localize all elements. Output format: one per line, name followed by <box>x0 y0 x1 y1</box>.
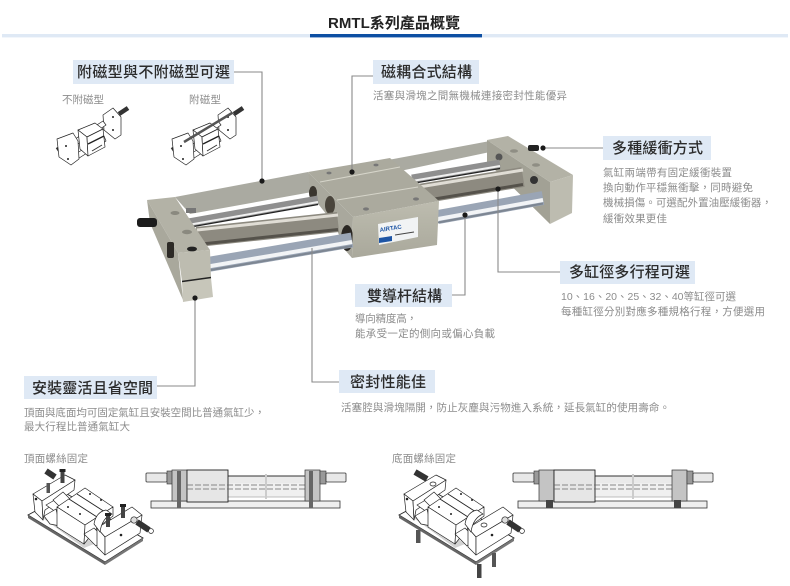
heading box <box>560 261 695 284</box>
description <box>24 406 265 433</box>
icon: magnetic cylinder <box>172 108 243 165</box>
anchor dot <box>349 169 355 175</box>
leader line <box>352 76 373 172</box>
description: 機械損傷。可選配外置油壓緩衝器， <box>603 196 772 209</box>
title: RMTL系列產品概覽 <box>328 14 460 32</box>
heading: 多缸徑多行程可選 <box>569 263 690 281</box>
heading: 密封性能佳 <box>350 373 426 391</box>
description: 頂面與底面均可固定氣缸且安裝空間比普通氣缸少， <box>24 406 265 419</box>
leader line <box>312 248 339 382</box>
back rail <box>175 172 312 214</box>
illustration: magnetic and non-magnetic variants <box>57 93 243 165</box>
heading box <box>355 284 452 307</box>
heading: 附磁型與不附磁型可選 <box>77 64 230 81</box>
anchor dot <box>495 186 501 192</box>
left rods <box>188 200 352 271</box>
section drawing <box>513 470 713 508</box>
callout: magnetic coupling <box>349 60 567 175</box>
leader line <box>157 298 195 386</box>
callout: flexible mounting <box>24 295 265 433</box>
description: 換向動作平穩無衝擊，同時避免 <box>603 181 754 194</box>
label: non-magnetic: 不附磁型 <box>62 93 104 106</box>
heading box <box>603 136 711 160</box>
anchor dot <box>540 145 546 151</box>
callout: sealing <box>312 248 670 414</box>
description <box>603 166 772 225</box>
description: 導向精度高， <box>355 312 417 325</box>
heading: 頂面螺絲固定 <box>24 452 88 465</box>
right rods <box>412 164 543 222</box>
section drawing <box>146 470 346 508</box>
callout: magnetic option <box>73 60 265 184</box>
isometric drawing <box>399 472 524 578</box>
description <box>561 290 765 318</box>
leader line <box>452 215 465 295</box>
heading box <box>373 60 479 84</box>
anchor dot <box>462 212 468 218</box>
panel: bottom screw mounting <box>392 452 713 578</box>
header rule <box>2 34 788 37</box>
heading: 磁耦合式結構 <box>381 63 472 81</box>
description: 緩衝效果更佳 <box>603 212 668 225</box>
description: 10、16、20、25、32、40等缸徑可選 <box>561 290 736 303</box>
description: 氣缸兩端帶有固定緩衝裝置 <box>603 166 732 179</box>
description <box>355 312 496 340</box>
leader line <box>498 189 560 272</box>
leader line <box>234 72 262 181</box>
main product: rodless cylinder <box>137 136 573 302</box>
callout: bore and stroke <box>495 186 765 318</box>
heading: 底面螺絲固定 <box>392 452 456 465</box>
callout: dual guide rods <box>355 212 496 340</box>
callout: cushioning <box>540 136 772 225</box>
isometric drawing <box>28 469 153 565</box>
anchor dot <box>259 178 265 184</box>
description: 活塞與滑塊之間無機械連接密封性能優异 <box>373 89 567 102</box>
right end block <box>487 136 573 224</box>
left end block <box>137 197 213 302</box>
anchor dot <box>192 295 198 301</box>
heading box <box>73 60 234 84</box>
description: 最大行程比普通氣缸大 <box>24 420 130 433</box>
heading: 多種緩衝方式 <box>612 139 703 157</box>
heading box <box>339 370 435 393</box>
description: 每種缸徑分別對應多種規格行程，方便選用 <box>561 305 765 318</box>
nameplate: AIRTAC <box>379 224 403 234</box>
description: 能承受一定的側向或偏心負載 <box>355 327 496 340</box>
label: magnetic: 附磁型 <box>189 93 221 106</box>
heading: 雙導杆結構 <box>367 287 442 305</box>
heading box <box>24 376 157 399</box>
icon: non-magnetic cylinder <box>57 108 128 165</box>
heading: 安裝靈活且省空間 <box>32 379 153 397</box>
description: 活塞腔與滑塊隔開，防止灰塵與污物進入系統，延長氣缸的使用壽命。 <box>341 401 670 414</box>
panel: top screw mounting <box>24 452 346 565</box>
leader line <box>543 147 603 149</box>
slider <box>308 158 439 258</box>
